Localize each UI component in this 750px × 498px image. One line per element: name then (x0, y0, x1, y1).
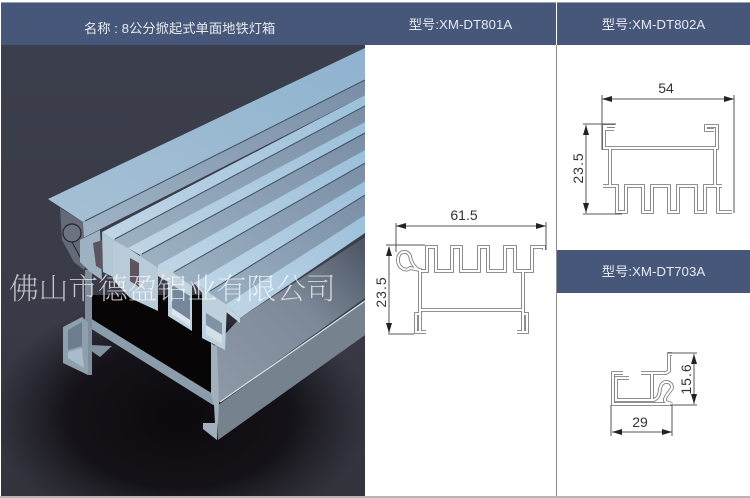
header: model XM-DT703A: 型号:XM-DT703A (602, 264, 705, 279)
drawing: DT801A cross section (373, 207, 546, 334)
dimension: width 29 (611, 353, 697, 436)
header: product name: 名称 : 8公分掀起式单面地铁灯箱 (84, 21, 275, 36)
rails (48, 48, 365, 323)
header: model XM-DT802A: 型号:XM-DT802A (602, 17, 705, 32)
dimension: width 61.5 (373, 207, 546, 334)
extrusion lower body (63, 237, 365, 440)
dimension: width 29: 15.6 (678, 363, 694, 395)
header: model XM-DT802A (557, 2, 750, 45)
header: model XM-DT703A (557, 250, 750, 293)
extrusion front profile (60, 208, 227, 350)
dimension: width 61.5: 61.5 (450, 207, 478, 223)
dimension: width 29: 29 (632, 414, 648, 430)
panel divider (556, 45, 557, 498)
drawing: DT703A cross section (611, 353, 697, 436)
backdrop (1, 45, 365, 497)
header: model XM-DT801A: 型号:XM-DT801A (409, 17, 512, 32)
company watermark: 佛山市德盈铝业有限公司 (9, 274, 336, 306)
header: product name (1, 2, 365, 45)
product photo: aluminium light box extrusion (1, 45, 365, 496)
header: model XM-DT801A (365, 2, 556, 45)
bottom border (0, 496, 750, 498)
dimension: width 61.5: 23.5 (373, 276, 389, 308)
dimension: width 54 (570, 80, 734, 214)
dimension: width 54: 23.5 (570, 152, 586, 184)
drawing: DT802A cross section (570, 80, 734, 214)
dimension: width 54: 54 (658, 80, 674, 96)
